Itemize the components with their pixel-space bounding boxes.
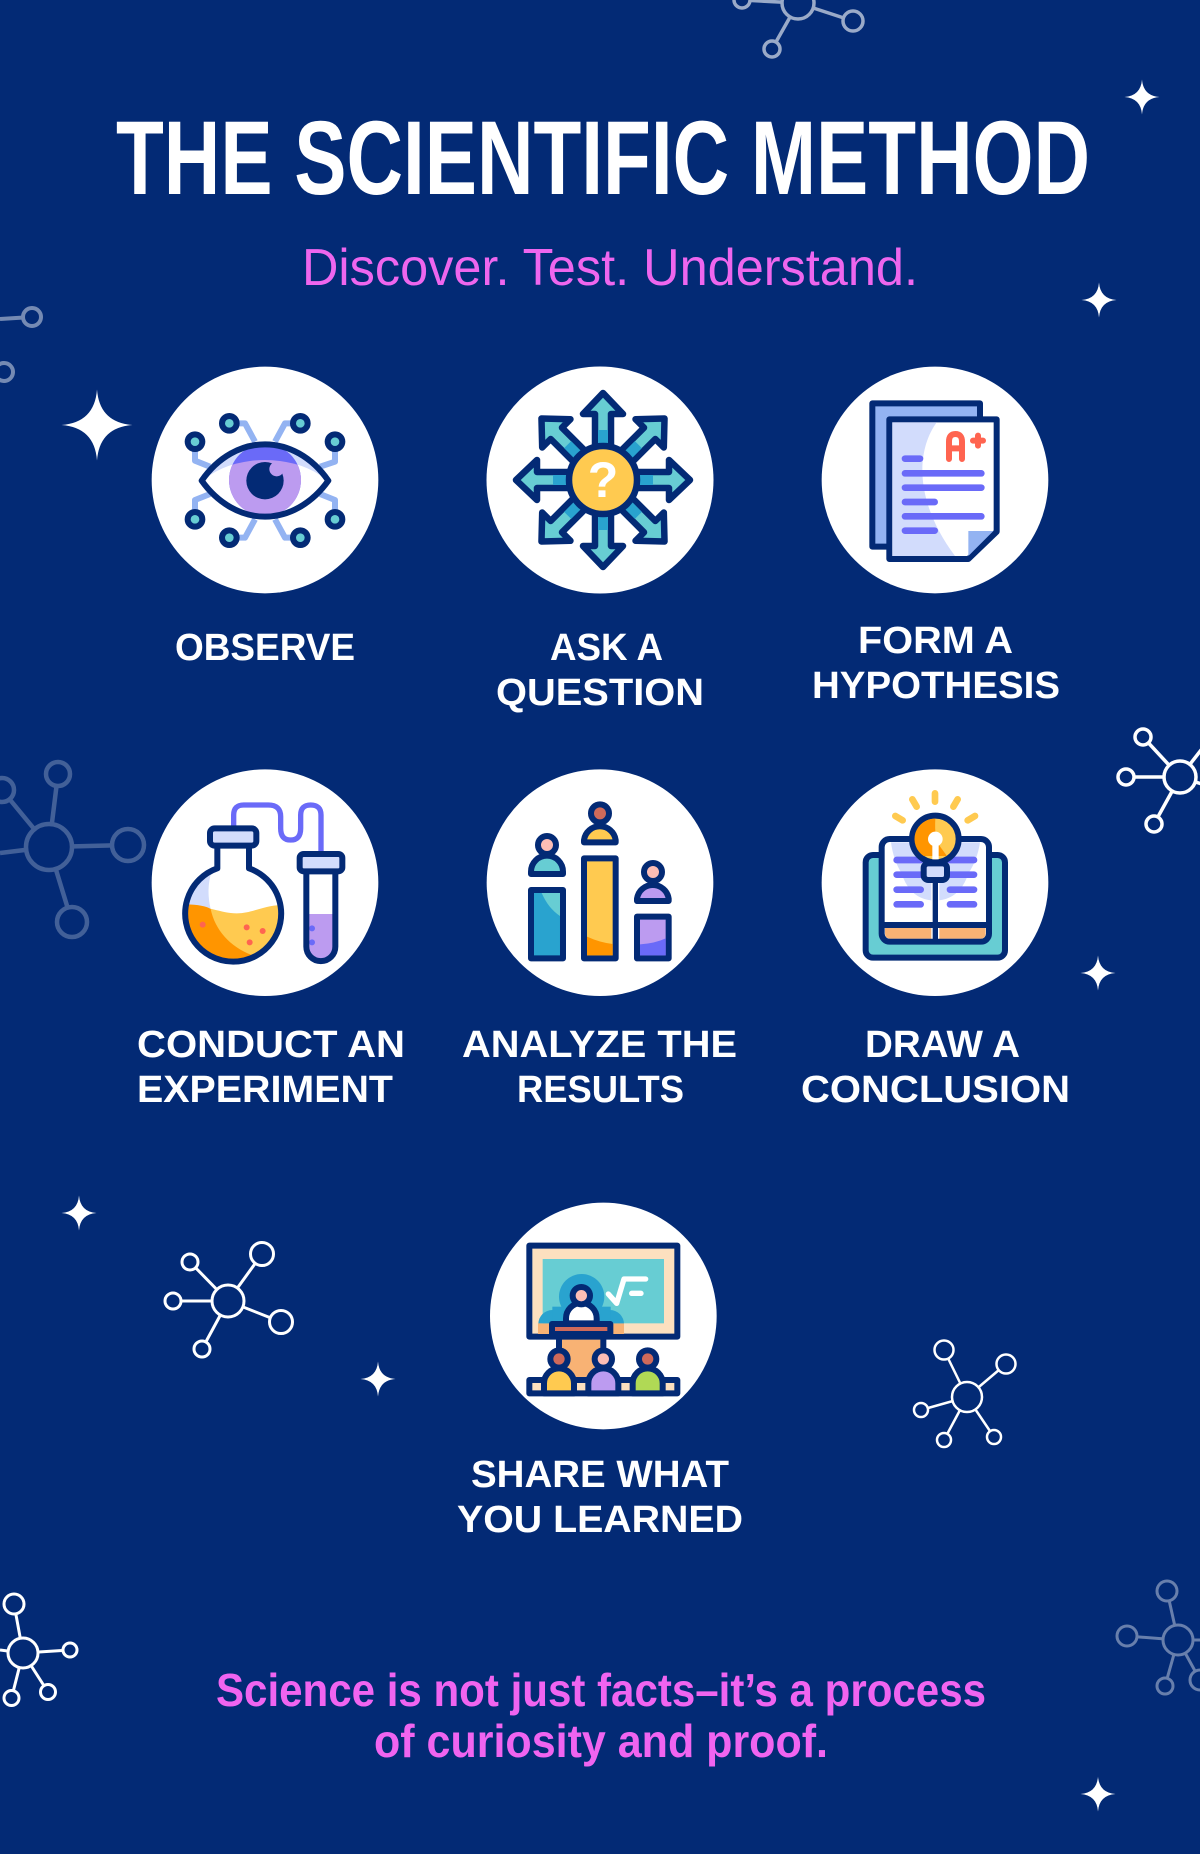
label: analyze the results xyxy=(462,1024,737,1111)
molecule: lower right xyxy=(914,1340,1016,1447)
panel: ask a question xyxy=(486,366,714,714)
icon: eye xyxy=(152,367,378,593)
closing statement: of curiosity and proof. xyxy=(374,1715,828,1767)
closing statement: Science is not just facts–it’s a process xyxy=(216,1664,986,1716)
panel: form a hypothesis xyxy=(812,367,1060,707)
label: ask a question xyxy=(496,627,704,714)
molecule: bottom left xyxy=(0,1594,77,1706)
icon: graded paper xyxy=(822,367,1048,593)
label: conduct an experiment: CONDUCT AN xyxy=(137,1024,405,1066)
label: form a hypothesis xyxy=(812,620,1060,707)
label: ask a question: ASK A xyxy=(550,627,663,669)
label: share what you learned: YOU LEARNED xyxy=(457,1499,743,1541)
icon: bar chart with people xyxy=(487,769,713,996)
panel: conduct an experiment xyxy=(137,769,405,1111)
label: conduct an experiment xyxy=(137,1024,405,1111)
icon: classroom presentation xyxy=(490,1203,717,1429)
panel: draw a conclusion xyxy=(801,769,1070,1111)
label: form a hypothesis: HYPOTHESIS xyxy=(812,665,1060,707)
molecule: bottom right xyxy=(1117,1581,1200,1694)
label: form a hypothesis: FORM A xyxy=(858,620,1013,662)
molecule: upper left edge xyxy=(0,308,41,381)
molecule: top centre xyxy=(734,0,863,57)
subtitle: Discover. Test. Understand. xyxy=(302,239,918,297)
label: observe: OBSERVE xyxy=(175,627,355,669)
molecule: large faint left xyxy=(0,762,144,937)
label: share what you learned: SHARE WHAT xyxy=(471,1454,729,1496)
icon: question arrows: ? xyxy=(588,452,618,508)
label: draw a conclusion: CONCLUSION xyxy=(801,1069,1070,1111)
closing statement xyxy=(216,1664,986,1767)
molecule: lower left xyxy=(165,1242,292,1357)
icon: question arrows xyxy=(486,366,714,594)
label: analyze the results: RESULTS xyxy=(517,1069,684,1111)
panel: analyze the results xyxy=(462,769,737,1111)
molecule: right edge xyxy=(1118,729,1200,832)
panel: share what you learned xyxy=(457,1203,743,1541)
icon: book and light bulb xyxy=(822,769,1048,996)
label: draw a conclusion: DRAW A xyxy=(865,1024,1020,1066)
label: analyze the results: ANALYZE THE xyxy=(462,1024,737,1066)
panel: observe xyxy=(152,367,378,669)
icon: flask and test tube xyxy=(152,769,378,996)
label: conduct an experiment: EXPERIMENT xyxy=(137,1069,393,1111)
label: draw a conclusion xyxy=(801,1024,1070,1111)
label: ask a question: QUESTION xyxy=(496,672,704,714)
label: share what you learned xyxy=(457,1454,743,1541)
